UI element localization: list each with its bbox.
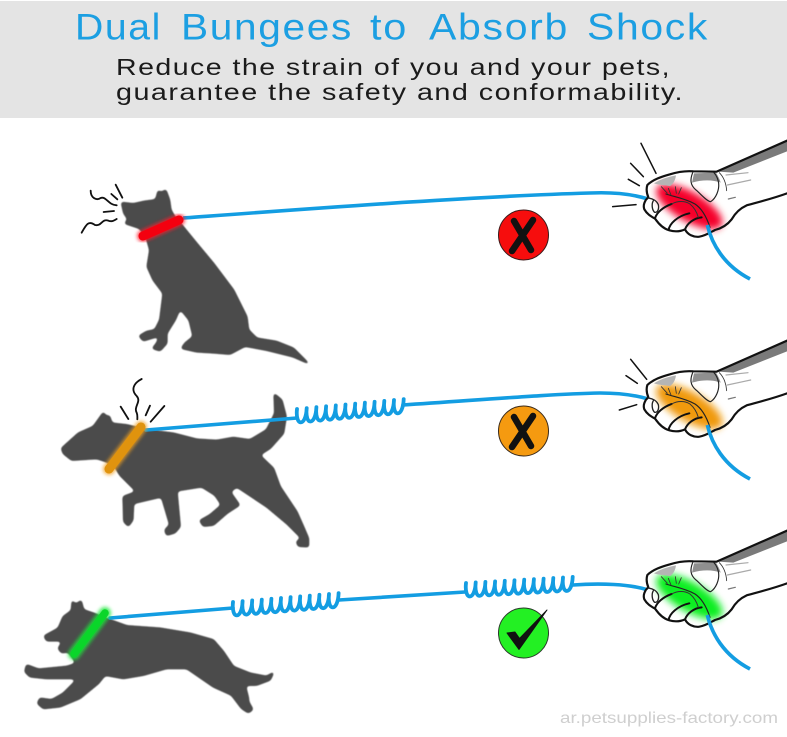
hand with red strain bbox=[613, 140, 787, 279]
dog running silhouette bbox=[25, 601, 273, 713]
row 3: dual bungee, green bbox=[25, 530, 787, 713]
title: Shock bbox=[587, 6, 709, 48]
stress marks bbox=[121, 379, 164, 422]
status icon: green check bbox=[498, 608, 548, 658]
title: Dual bbox=[75, 6, 162, 48]
hand with orange strain bbox=[619, 340, 787, 479]
red collar bbox=[143, 220, 179, 236]
row 2: one bungee, orange bbox=[62, 340, 787, 547]
watermark: ar.petsupplies-factory.com bbox=[560, 710, 778, 727]
leash bbox=[183, 193, 648, 218]
title: Absorb bbox=[429, 6, 569, 48]
row 1: no bungee, red bbox=[82, 140, 787, 363]
subtitle: Reduce the strain of you and your pets, bbox=[116, 54, 671, 80]
hand with green relief bbox=[643, 530, 787, 669]
subtitle: guarantee the safety and conformability. bbox=[116, 79, 684, 105]
title: Bungees bbox=[181, 6, 353, 48]
status icon: red cross bbox=[498, 210, 548, 260]
bark marks bbox=[82, 185, 122, 233]
title: to bbox=[370, 6, 408, 48]
leash with bungee coil bbox=[146, 393, 648, 430]
dog sitting silhouette bbox=[122, 190, 308, 363]
dog walking silhouette bbox=[62, 394, 308, 547]
green collar bbox=[74, 613, 105, 654]
orange collar bbox=[109, 427, 141, 469]
leash with two bungee coils bbox=[110, 577, 648, 618]
status icon: orange cross bbox=[498, 406, 548, 456]
header band bbox=[0, 1, 787, 118]
